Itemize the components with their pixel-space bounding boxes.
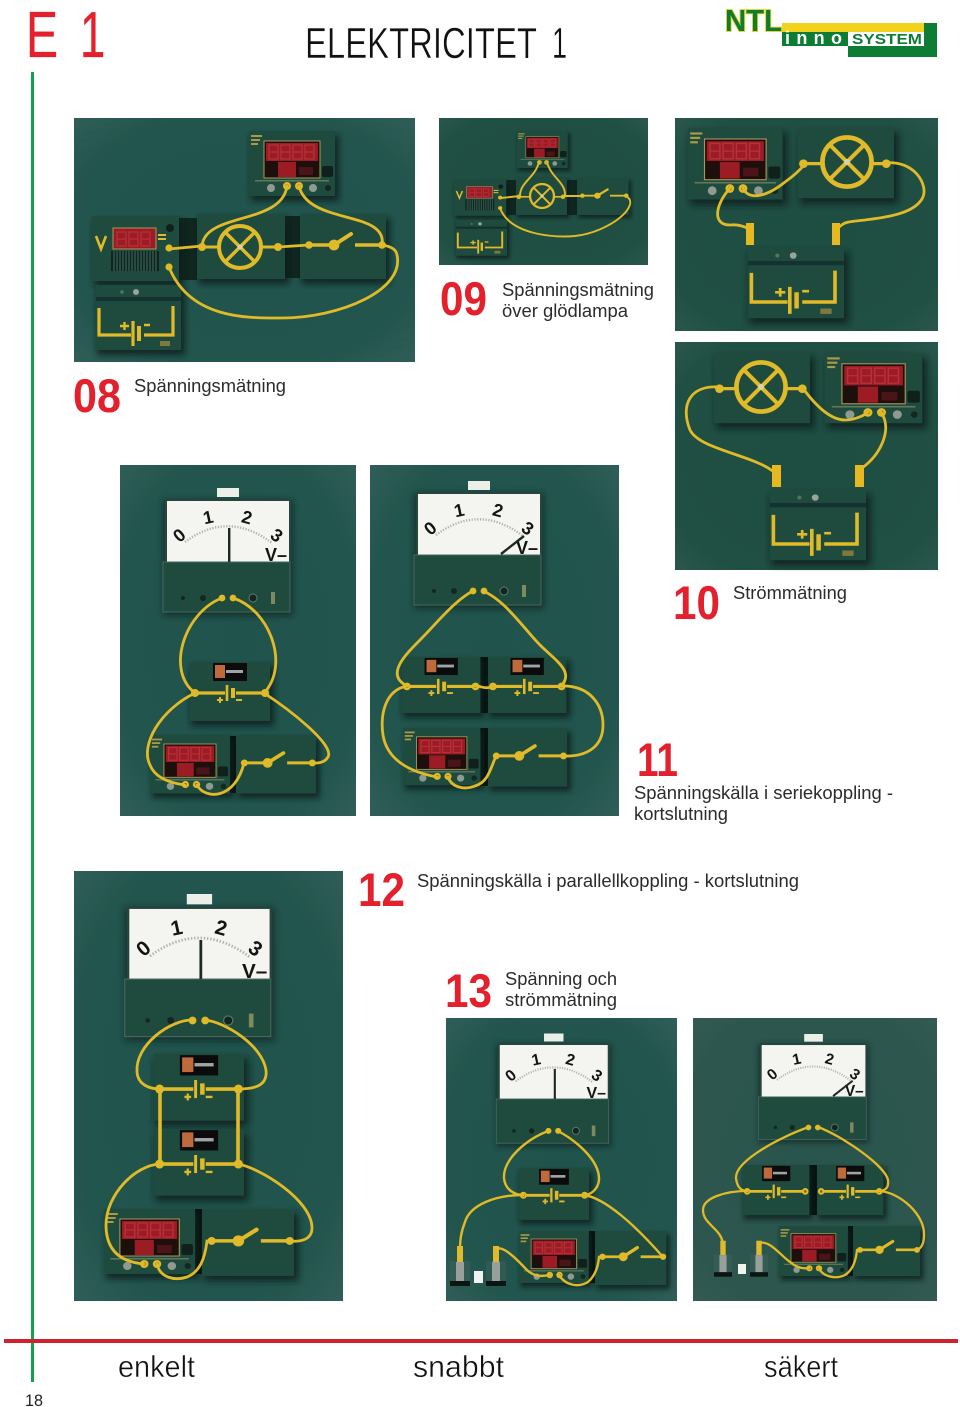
bulb module (197, 214, 289, 284)
panel: 13 photo right (693, 1018, 937, 1301)
analog voltmeter: 2 (823, 1050, 836, 1069)
analog voltmeter (496, 1034, 611, 1147)
battery module (456, 220, 509, 258)
logo: NTL innosystem: NTL (725, 3, 782, 38)
panel: 13 photo left (446, 1018, 677, 1301)
analog voltmeter (758, 1034, 869, 1143)
panel: 12 photo (74, 871, 343, 1301)
caption: 11: Spänningskälla i seriekoppling - (634, 783, 893, 803)
label: 09: 09 (440, 272, 487, 325)
analog voltmeter: 3 (588, 1067, 605, 1086)
title: ELEKTRICITET (305, 19, 537, 68)
digital meter (104, 1209, 199, 1279)
switch module (202, 1209, 298, 1281)
title: 1 (552, 19, 567, 68)
caption: 13 (505, 969, 617, 1010)
analog voltmeter (125, 894, 274, 1041)
panel: 11 photo left (120, 465, 356, 816)
panel: 10 photo bottom (675, 342, 938, 570)
bulb module (798, 128, 898, 204)
analog voltmeter: 1 (530, 1051, 543, 1070)
wires (382, 591, 603, 788)
panel: 11 photo right (370, 465, 619, 816)
switch module (488, 728, 571, 791)
analog voltmeter: 2 (213, 916, 230, 941)
logo: NTL innosystem: SYSTEM (852, 31, 922, 48)
digital meter (403, 728, 484, 790)
caption: 09: över glödlampa (502, 301, 629, 321)
analog voltmeter: V– (586, 1085, 606, 1102)
switch module (853, 1226, 923, 1280)
battery module (770, 490, 871, 566)
panel: 08 photo (74, 118, 415, 362)
digital meter (779, 1226, 851, 1280)
analog voltmeter: 2 (564, 1051, 577, 1070)
caption: 12: Spänningskälla i parallellkoppling - kortslutning (417, 871, 799, 891)
heading: section code E 1 (26, 0, 105, 72)
footer word: enkelt: enkelt (118, 1349, 195, 1384)
voltage source (454, 180, 509, 218)
switch module (577, 178, 631, 218)
label: 11: 11 (637, 733, 678, 786)
bulb module (516, 178, 569, 218)
battery module (748, 248, 849, 324)
digital meter (688, 128, 787, 205)
digital meter (519, 1231, 592, 1287)
plugs (450, 1246, 506, 1286)
analog voltmeter: V– (845, 1083, 864, 1100)
digital meter (517, 131, 570, 171)
clips (772, 465, 864, 487)
label: 08: 08 (73, 369, 121, 422)
wires (718, 163, 924, 229)
analog voltmeter: 1 (169, 916, 185, 941)
analog voltmeter: 2 (490, 500, 505, 521)
wires (460, 1131, 663, 1285)
left green rule (31, 72, 34, 1382)
analog voltmeter: 0 (420, 518, 441, 539)
logo: NTL innosystem (725, 3, 937, 57)
battery module (190, 662, 274, 726)
analog voltmeter: 3 (244, 936, 267, 962)
caption: 13: Spänning och (505, 969, 617, 989)
wires (169, 186, 398, 318)
plugs (714, 1241, 768, 1277)
footer red rule (4, 1339, 958, 1343)
switch module (236, 735, 320, 798)
caption: 09: Spänningsmätning (502, 280, 654, 300)
analog voltmeter: 0 (764, 1065, 781, 1084)
analog voltmeter: 2 (239, 507, 254, 528)
footer word: snabbt: snabbt (413, 1349, 504, 1384)
wires (686, 387, 886, 473)
battery modules (743, 1165, 887, 1219)
caption: 10: Strömmätning (733, 583, 847, 603)
analog voltmeter: V– (265, 545, 287, 565)
battery modules (154, 1054, 248, 1201)
heading: section code E 1: 1 (80, 0, 105, 71)
battery module (96, 285, 185, 355)
digital meter (249, 131, 339, 201)
footer word: säkert: säkert (764, 1349, 838, 1384)
voltage source (92, 216, 184, 286)
label: 10: 10 (673, 576, 720, 629)
caption: 09 (502, 280, 654, 321)
analog voltmeter: 1 (201, 507, 215, 528)
heading: section code E 1: E (26, 0, 58, 72)
clips (746, 223, 840, 245)
analog voltmeter: 0 (169, 525, 190, 546)
wires (147, 598, 329, 794)
logo: NTL innosystem: inno (785, 28, 842, 48)
analog voltmeter: 1 (452, 500, 466, 521)
analog voltmeter: 0 (502, 1067, 520, 1085)
wires (106, 1020, 312, 1279)
analog voltmeter: 0 (132, 936, 156, 961)
switch module (595, 1231, 670, 1289)
bulb module (714, 353, 814, 429)
caption: 11: kortslutning (634, 804, 728, 824)
caption: 11 (634, 783, 893, 824)
wires (703, 1127, 924, 1277)
battery modules (402, 657, 570, 718)
wires (500, 162, 630, 236)
panel: 09 photo (439, 118, 648, 265)
battery module (519, 1168, 592, 1224)
label: 13: 13 (445, 964, 492, 1017)
analog voltmeter: 1 (791, 1050, 803, 1069)
panel: 10 photo top (675, 118, 938, 331)
label: 12: 12 (358, 863, 405, 916)
analog voltmeter (163, 488, 293, 616)
analog voltmeter: 3 (518, 517, 538, 539)
caption: 08: Spänningsmätning (134, 376, 286, 396)
switch module (300, 214, 390, 284)
digital meter (825, 353, 927, 429)
caption: 13: strömmätning (505, 990, 617, 1010)
analog voltmeter (414, 481, 544, 609)
analog voltmeter: V– (242, 960, 267, 983)
analog voltmeter: 3 (846, 1065, 863, 1084)
digital meter (150, 735, 234, 798)
analog voltmeter: V– (516, 538, 538, 558)
analog voltmeter: 3 (267, 524, 287, 546)
